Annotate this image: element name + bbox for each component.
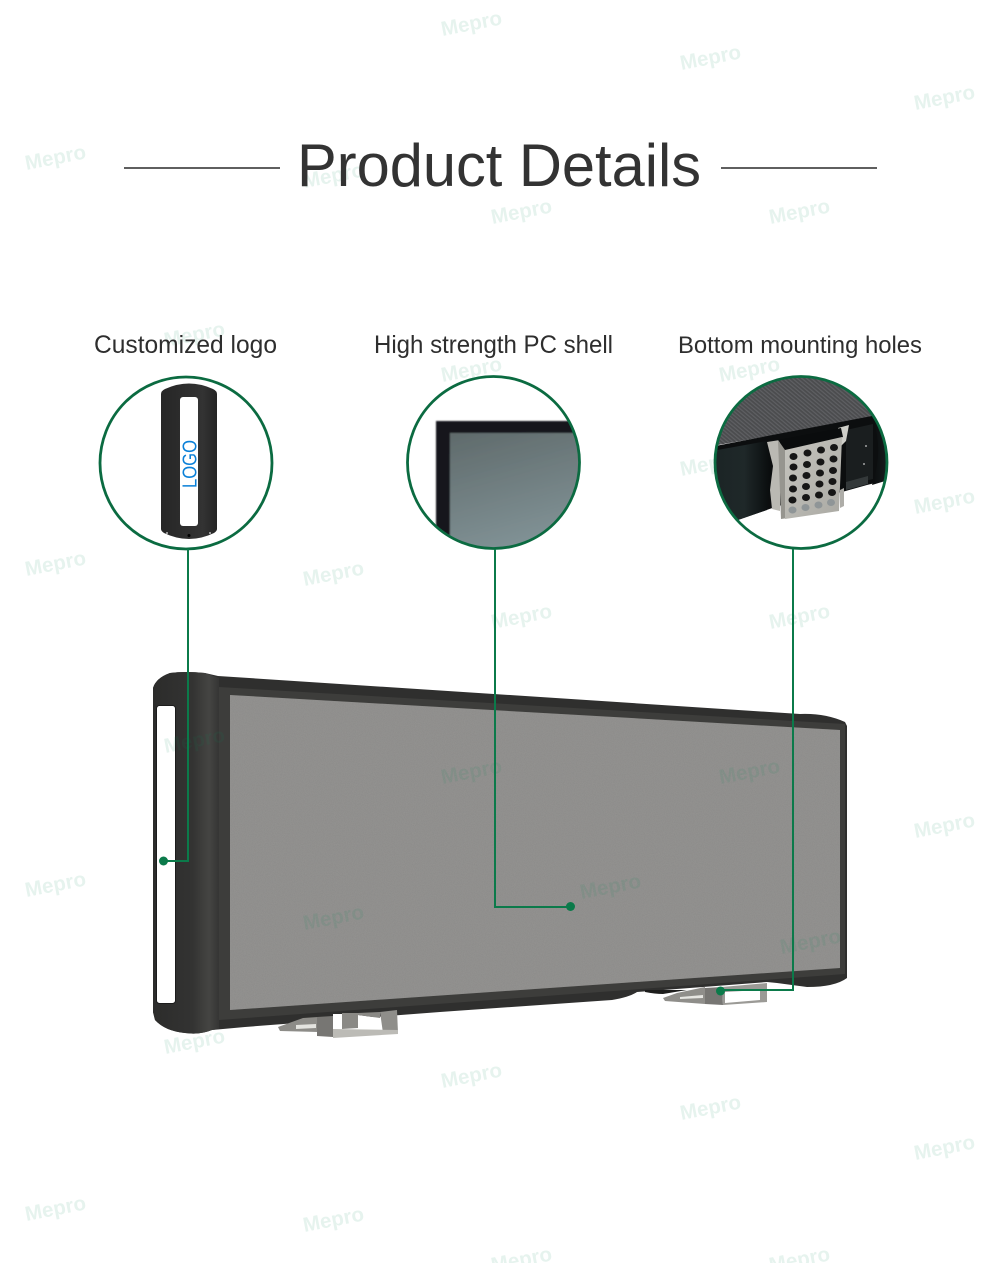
- inner frame: [219, 687, 845, 1020]
- left end cap: [153, 672, 219, 1034]
- bracket top: [778, 428, 843, 442]
- product: LED display panel: [153, 672, 847, 1038]
- watermarks over panel: Mepro: [439, 755, 504, 789]
- watermarks: Mepro: [162, 1025, 227, 1059]
- watermarks over panel: [162, 724, 843, 959]
- connector: PC shell: [495, 549, 575, 911]
- rail slot: [846, 424, 873, 486]
- watermarks: Mepro: [912, 1131, 977, 1165]
- watermarks: Mepro: [439, 7, 504, 41]
- watermarks: Mepro: [439, 353, 504, 387]
- left mounting bracket: [278, 1010, 398, 1038]
- logo window: [180, 397, 198, 526]
- watermarks: Mepro: [717, 353, 782, 387]
- watermarks: Mepro: [767, 195, 832, 229]
- right mounting bracket: [663, 983, 767, 1005]
- watermarks: Mepro: [301, 1203, 366, 1237]
- right cap: [872, 438, 886, 485]
- watermarks: Mepro: [162, 318, 227, 352]
- watermarks: Mepro: [678, 1091, 743, 1125]
- underside bump: [645, 990, 687, 994]
- panel underside: [716, 378, 886, 520]
- perforated plate: [785, 437, 842, 519]
- connector: customized logo: [159, 549, 188, 866]
- watermarks: Mepro: [767, 600, 832, 634]
- watermarks: Mepro: [912, 809, 977, 843]
- watermarks over panel: Mepro: [717, 755, 782, 789]
- watermarks over panel: Mepro: [301, 901, 366, 935]
- bracket side tabs: [767, 440, 780, 511]
- watermarks: Mepro: [439, 1059, 504, 1093]
- logo text: LOGO: [180, 440, 202, 488]
- watermarks over panel: Mepro: [778, 925, 843, 959]
- watermarks: Mepro: [23, 1192, 88, 1226]
- watermarks over panel: Mepro: [578, 870, 643, 904]
- ring: [408, 376, 580, 548]
- watermarks: Mepro: [678, 447, 743, 481]
- watermarks: Mepro: [23, 141, 88, 175]
- watermarks over panel: Mepro: [162, 724, 227, 758]
- title: Product Details: [297, 132, 701, 199]
- frame corner: [434, 420, 578, 548]
- detail circle: customized logo: [100, 377, 272, 549]
- screen grain: [225, 690, 845, 1015]
- left cap: [716, 442, 768, 520]
- watermarks: Mepro: [23, 868, 88, 902]
- plate side fold: [778, 440, 785, 519]
- watermarks: Mepro: [489, 195, 554, 229]
- ring: [715, 376, 887, 548]
- panel shell: [153, 672, 847, 1034]
- label: customized logo: Customized logo: [94, 331, 277, 359]
- watermarks: Mepro: [301, 557, 366, 591]
- connector: mounting holes: [716, 549, 793, 996]
- label: bottom mounting holes: Bottom mounting holes: [678, 332, 922, 359]
- watermarks: Mepro: [912, 81, 977, 115]
- detail circle: bottom mounting holes: [710, 370, 895, 548]
- lower holes: [788, 499, 835, 514]
- ring: [100, 377, 272, 549]
- detail circle: PC shell corner: [406, 375, 581, 550]
- watermarks: Mepro: [489, 600, 554, 634]
- white logo strip: [156, 706, 176, 1004]
- display screen: [230, 695, 840, 1010]
- watermarks: Mepro: [301, 159, 366, 193]
- cap screw holes: [166, 532, 211, 537]
- watermarks: Mepro: [912, 485, 977, 519]
- watermarks: Mepro: [678, 41, 743, 75]
- end cap with logo window: [161, 384, 217, 539]
- label: high strength PC shell: High strength PC shell: [374, 331, 613, 359]
- watermarks: Mepro: [23, 547, 88, 581]
- plate holes: [788, 444, 838, 504]
